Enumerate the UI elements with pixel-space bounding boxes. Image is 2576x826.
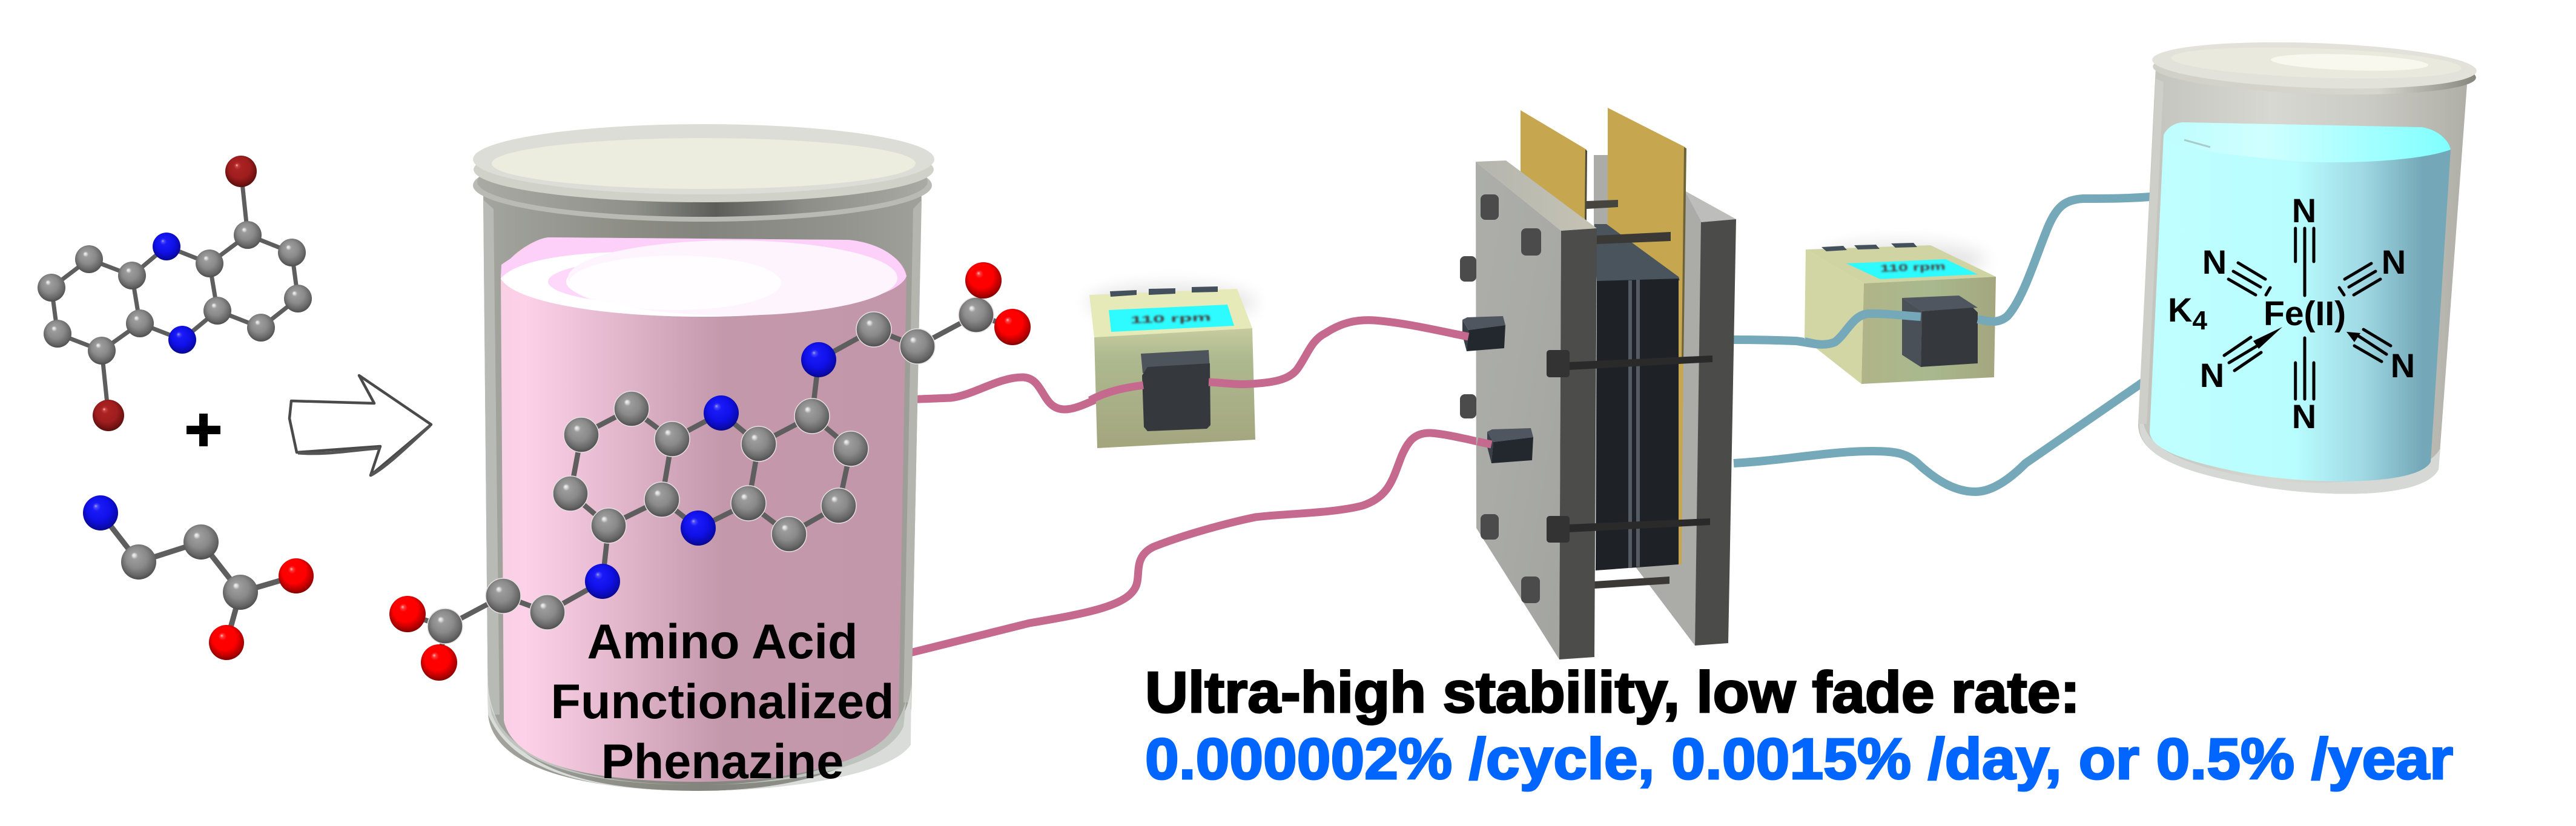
outlet fitting [1487,428,1533,463]
tube: blue jar to stack [1734,382,2143,492]
tube: blue pump to jar [1978,196,2157,322]
chemical structure: potassium ferrocyanide: N [2391,346,2415,385]
chemical structure: potassium ferrocyanide: N [2292,397,2316,435]
tube ends: pink over stack fittings [1453,334,1491,444]
fade rate values: 0.000002% /cycle, 0.0015% /day, or 0.5% /year [1145,727,2453,791]
chemical structure: potassium ferrocyanide: K [2168,291,2192,329]
label: amino acid functionalized phenazine: Amino Acid [587,615,858,669]
panel: blue side pump [1805,242,1996,384]
tube: pink pump to stack [1209,320,1468,385]
chemical structure: potassium ferrocyanide: Fe(II) [2264,294,2346,333]
tube: blue stack to pump [1734,314,1921,345]
chemical structure: potassium ferrocyanide: 4 [2192,306,2207,335]
label: amino acid functionalized phenazine [551,615,894,789]
current collector plates [1521,108,1686,564]
tube: blue segment over pump right [1978,316,2007,322]
molecule: amino acid functionalized phenazine [389,262,1031,681]
chemical structure: potassium ferrocyanide: N [2202,243,2227,281]
chemical structure: potassium ferrocyanide [2168,191,2415,435]
label: amino acid functionalized phenazine: Functionalized [551,675,894,729]
chemical structure: potassium ferrocyanide: N [2382,243,2406,281]
tube: blue segment over pump left [1805,314,1921,345]
inlet fitting [1462,316,1505,351]
plus sign [187,414,220,446]
molecule: dibromophenazine [38,156,312,431]
panel: flow cell stack [1460,108,1736,659]
panel: blue side pump: 110 rpm [1880,260,1946,274]
chemical structure: potassium ferrocyanide: N [2292,191,2316,230]
front plate bolts [1460,194,1541,603]
arrow: reaction [289,375,431,475]
panel: pink electrolyte jar [473,124,934,791]
tube: pink return from stack to jar [903,433,1491,655]
chemical structure: potassium ferrocyanide: N [2200,356,2224,394]
membrane electrode stack [1594,224,1680,570]
label: amino acid functionalized phenazine: Phenazine [601,735,844,789]
panel: blue electrolyte jar [2138,38,2477,494]
panel: pink side pump [1087,285,1257,448]
molecule: amino acid [83,495,314,660]
heading: stability claim: Ultra-high stability, low fade rate: [1145,660,2080,725]
lower tie rod [1547,516,1710,543]
upper tie rod [1547,350,1712,377]
panel: pink side pump: 110 rpm [1130,311,1211,326]
tube: pink jar to pump [905,377,1141,409]
